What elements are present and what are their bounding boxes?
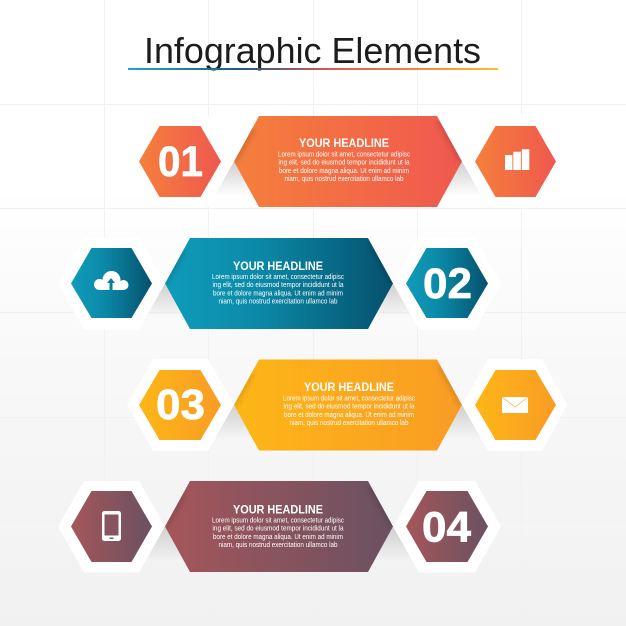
headline and body text: YOUR HEADLINE (304, 380, 394, 394)
headline and body text (283, 380, 415, 427)
fold shadows (139, 526, 419, 572)
headline and body text (212, 502, 344, 549)
icon hexagon: cloud upload (71, 248, 152, 318)
white hexagon backings (127, 359, 567, 451)
headline and body text: YOUR HEADLINE (233, 259, 323, 273)
number hexagon 01: 01 (158, 138, 203, 186)
panel: row 2 (58, 238, 501, 330)
headline and body text: niam, quis nostrud exercitation ullamco lab (284, 176, 404, 183)
white hexagon backings (58, 238, 501, 330)
headline and body text: niam, quis nostrud exercitation ullamco lab (218, 542, 338, 549)
headline and body text: Lorem ipsum dolor sit amet, consectetur adipisc (278, 152, 410, 158)
headline and body text: niam, quis nostrud exercitation ullamco lab (218, 299, 338, 306)
headline and body text: ing elit, sed do eiusmod tempor incididunt ut la (212, 526, 344, 533)
icon hexagon: tablet (71, 491, 152, 562)
centre banner (165, 238, 393, 329)
centre banner (234, 360, 462, 450)
number hexagon 02 (406, 248, 488, 318)
fold shadows (208, 162, 488, 208)
icon hexagon: envelope (475, 370, 556, 440)
number hexagon 04 (406, 491, 488, 562)
headline and body text: Lorem ipsum dolor sit amet, consectetur adipisc (283, 396, 415, 402)
headline and body text: YOUR HEADLINE (233, 502, 323, 516)
headline and body text: bore et dolore magna aliqua. Ut enim ad minim (213, 290, 343, 297)
headline and body text: bore et dolore magna aliqua. Ut enim ad minim (284, 412, 414, 419)
headline and body text: YOUR HEADLINE (299, 136, 389, 150)
centre banner (165, 481, 393, 572)
panel: row 3 (127, 359, 567, 451)
headline and body text: ing elit, sed do eiusmod tempor incididunt ut la (278, 160, 410, 167)
centre banner (234, 116, 462, 207)
headline and body text: Lorem ipsum dolor sit amet, consectetur adipisc (212, 518, 344, 524)
number hexagon 03: 03 (156, 381, 205, 429)
title: Infographic Elements (144, 30, 481, 71)
panel: row 4 (58, 481, 501, 572)
headline and body text: bore et dolore magna aliqua. Ut enim ad minim (279, 168, 409, 175)
headline and body text: ing elit, sed do eiusmod tempor incididunt ut la (212, 282, 344, 289)
headline and body text (212, 259, 344, 306)
number hexagon 02: 02 (423, 260, 472, 308)
number hexagon 04: 04 (422, 504, 471, 552)
headline and body text: ing elit, sed do eiusmod tempor incididunt ut la (284, 404, 415, 411)
white hexagon backings (58, 481, 501, 572)
fold shadows (208, 405, 488, 451)
white hexagon backings (127, 116, 568, 208)
headline and body text: niam, quis nostrud exercitation ullamco lab (290, 420, 409, 427)
panel: row 1 (127, 116, 568, 208)
fold shadows (139, 284, 419, 330)
headline and body text: bore et dolore magna aliqua. Ut enim ad minim (213, 534, 343, 541)
title underline (128, 68, 498, 70)
number hexagon 03 (139, 370, 221, 440)
headline and body text: Lorem ipsum dolor sit amet, consectetur adipisc (212, 274, 344, 281)
icon hexagon: bar chart (475, 126, 556, 197)
number hexagon 01 (139, 126, 221, 197)
headline and body text (278, 136, 410, 183)
